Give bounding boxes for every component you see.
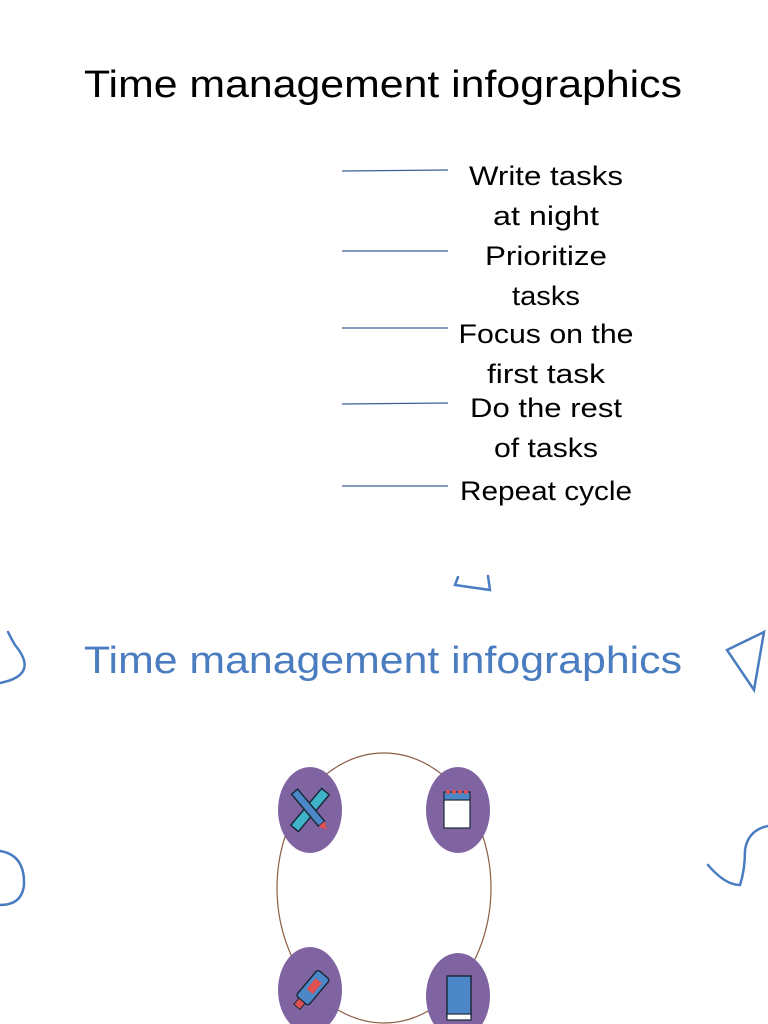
step text [458,161,634,506]
ring [277,753,491,1023]
step text: Do the rest [470,393,623,423]
cycle diagram [277,753,491,1024]
step text: Focus on the [458,319,634,349]
icon: ruler and pencil [278,767,342,853]
connector lines [342,170,448,486]
icon: highlighter [278,947,342,1024]
step text: tasks [512,281,580,311]
icon: book [426,953,490,1024]
subtitle: Time management infographics [84,640,682,682]
step text: Repeat cycle [460,476,632,506]
title: Time management infographics [84,64,682,106]
step text: at night [493,201,600,231]
icon: notepad [426,767,490,853]
step text: Prioritize [485,241,607,271]
step text: of tasks [494,433,598,463]
step text: Write tasks [469,161,623,191]
step list [342,161,634,506]
step text: first task [487,359,606,389]
decorative doodles [0,576,768,905]
